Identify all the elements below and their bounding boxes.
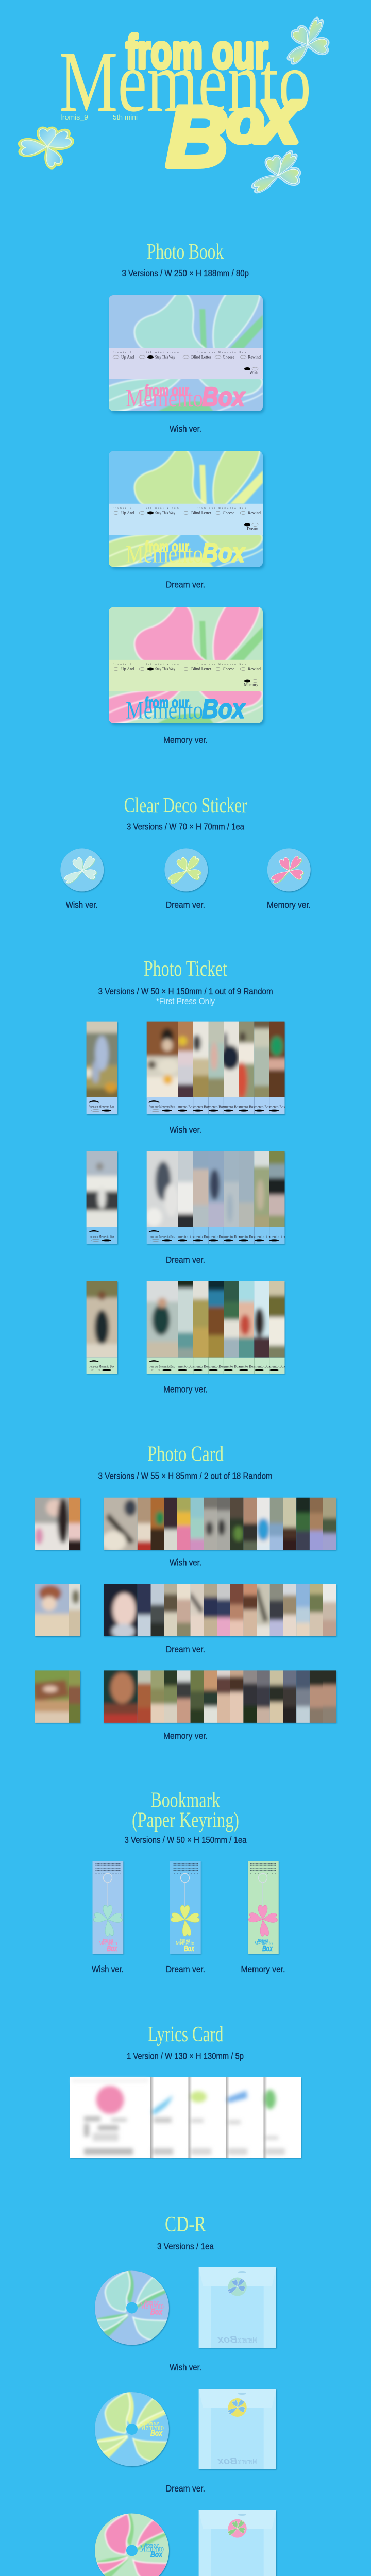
photo card row: Wish xyxy=(30,1493,371,1565)
CD sleeve: Wish xyxy=(199,2267,276,2348)
lyrics card 1 content xyxy=(72,2079,148,2155)
ticket panel text: Dream set: mento Box xyxy=(239,1234,255,1239)
label: card Wish: Wish ver. xyxy=(170,1557,201,1567)
ticket panel text: Wish set: mento Box xyxy=(239,1105,255,1109)
ticket row: Memory xyxy=(82,1277,321,1374)
photo card row: Dream xyxy=(30,1580,371,1651)
panel: Photo Book Memory: Rewind xyxy=(248,667,261,671)
ticket panel text: Memory set: mento Box xyxy=(178,1365,194,1369)
ticket: Memory single xyxy=(82,1277,138,1374)
bookmark: Memory: from our xyxy=(258,1938,268,1943)
cards: Wish single pair xyxy=(30,1493,120,1565)
ticket row: Wish xyxy=(82,1017,321,1114)
label: ticket Memory: Memory ver. xyxy=(163,1384,208,1395)
heading: Lyrics Card: Lyrics Card xyxy=(148,2023,224,2046)
panel: Photo Book Dream: fromis_9 xyxy=(113,506,132,509)
panel: Photo Book Dream: Memento xyxy=(126,539,203,568)
spec: sticker: 3 Versions / W 70 × H 70mm / 1ea xyxy=(127,822,244,832)
panel: Photo Book Wish: Stay This Way xyxy=(155,354,175,360)
CD disc: Wish: Box xyxy=(150,2308,163,2316)
CD disc: Wish: Memento xyxy=(140,2301,164,2311)
CD disc: Memory xyxy=(93,2512,171,2576)
title: Box: o xyxy=(227,88,264,156)
panel: Photo Book Memory: Box xyxy=(202,694,246,724)
panel: Photo Book Wish: Wish xyxy=(249,370,258,375)
ticket panel text: Dream set: mento Box xyxy=(269,1234,285,1239)
ticket panel text: Memory set: mento Box xyxy=(209,1365,225,1369)
label: Memory ver.: Memory ver. xyxy=(163,735,208,745)
heading: Bookmark (Paper Keyring) xyxy=(132,1789,239,1832)
CD disc: Dream: from our xyxy=(145,2421,159,2426)
panel: Photo Book Wish: fromis_9 xyxy=(113,351,132,353)
panel: Photo Book Wish: Cheese xyxy=(223,354,235,360)
panel: Photo Book Wish: Up And xyxy=(121,354,134,360)
bookmark: Wish: Memento xyxy=(99,1940,117,1947)
label: Dream ver.: Dream ver. xyxy=(166,579,205,589)
label: Wish ver.: Wish ver. xyxy=(170,423,201,434)
bookmark: Memory xyxy=(248,1861,279,1954)
panel: Photo Book Dream xyxy=(107,449,263,569)
ticket panel text: Dream set: mento Box xyxy=(194,1234,210,1239)
CD sleeve: Wish: Box xyxy=(217,2334,238,2345)
label: bookmark Wish: Wish ver. xyxy=(92,1964,124,1974)
bookmark: Dream: Box xyxy=(184,1944,194,1953)
heading: CD-R: CD-R xyxy=(165,2213,206,2236)
label: CD Dream: Dream ver. xyxy=(166,2483,205,2494)
title logo xyxy=(59,26,311,185)
tickets: Wish set xyxy=(142,1017,321,1114)
cards: Dream single pair xyxy=(30,1580,120,1651)
label: CD Wish: Wish ver. xyxy=(170,2362,201,2372)
label: sticker Wish: Wish ver. xyxy=(66,900,98,910)
panel: Photo Book Memory: 5th mini album xyxy=(146,663,180,666)
lyrics card 4 content xyxy=(227,2091,247,2155)
lyrics cards xyxy=(70,2077,301,2158)
ticket panel text: Wish set: mento Box xyxy=(194,1105,210,1109)
panel: Photo Book Memory: Up And xyxy=(121,667,134,671)
ticket panel text: Dream set xyxy=(148,1227,285,1244)
CD disc: Memory: from our xyxy=(145,2542,159,2547)
ticket panel text: Wish set: mento Box xyxy=(255,1105,271,1109)
panel: Photo Book Wish: Memento xyxy=(126,384,203,412)
heading: Clear Deco Sticker: Clear Deco Sticker xyxy=(124,794,247,818)
tickets: Dream set xyxy=(142,1146,321,1244)
heading: Photo Card: Photo Card xyxy=(147,1443,224,1466)
ticket panel text: Memory single: from our Memento Box xyxy=(89,1365,114,1369)
panel: Photo Book Wish xyxy=(107,294,263,414)
ticket: Wish single xyxy=(82,1017,138,1114)
spec: CD-R: 3 Versions / 1ea xyxy=(157,2241,214,2251)
label: ticket Wish: Wish ver. xyxy=(170,1125,201,1135)
label: card Dream: Dream ver. xyxy=(166,1644,205,1654)
CD disc: Wish: from our xyxy=(145,2300,159,2305)
label: bookmark Dream: Dream ver. xyxy=(166,1964,205,1974)
spec: bookmark: 3 Versions / W 50 × H 150mm / 1ea xyxy=(125,1835,247,1845)
panel: Photo Book Dream: Blind Letter xyxy=(191,511,211,515)
ticket panel text: Wish set: mento Box xyxy=(269,1105,285,1109)
heading: Photo Ticket: Photo Ticket xyxy=(144,957,227,981)
sticker: Memory xyxy=(267,848,311,891)
panel: Photo Book Memory: Stay This Way xyxy=(155,667,175,671)
ticket panel text: Wish set: mento Box xyxy=(209,1105,225,1109)
panel: Photo Book Dream: from our Memento Box xyxy=(197,506,247,509)
spec: photo card: 3 Versions / W 55 × H 85mm / 2 out of 18 Random xyxy=(98,1470,273,1481)
title: Box: B xyxy=(166,88,228,185)
sticker: Dream xyxy=(164,848,208,891)
CD sleeve: Memory xyxy=(199,2510,276,2576)
bookmark: Memory: Box xyxy=(262,1944,273,1953)
cards: Memory set xyxy=(99,1666,371,1737)
CD disc: Dream: Memento xyxy=(140,2422,164,2432)
panel: Photo Book Dream: 5th mini album xyxy=(146,506,180,509)
ticket panel text: Memory set: mento Box xyxy=(224,1365,240,1369)
ticket panel text: Dream set: mento Box xyxy=(209,1234,225,1239)
heading: Bookmark (Paper Keyring): (Paper Keyring) xyxy=(132,1808,239,1832)
ticket panel text: Wish set: mento Box xyxy=(224,1105,240,1109)
bookmark: Dream xyxy=(170,1861,201,1954)
panel: Photo Book Memory: Blind Letter xyxy=(191,667,211,671)
panel: Photo Book Wish: from our xyxy=(145,382,189,399)
icon: clover left xyxy=(21,129,73,168)
panel: Photo Book Dream: Dream xyxy=(247,526,259,531)
ticket panel text: Wish set xyxy=(148,1097,285,1114)
CD disc: Wish xyxy=(93,2269,171,2346)
ticket panel text: Dream set: mento Box xyxy=(255,1234,271,1239)
bookmark: Dream: Memento xyxy=(176,1940,194,1947)
CD sleeve: Dream: Box xyxy=(217,2456,238,2466)
photo card row: Memory xyxy=(30,1666,371,1737)
spec: Photo Book: 3 Versions / W 250 × H 188mm / 80p xyxy=(122,268,249,278)
ticket panel text: Memory set xyxy=(148,1357,285,1374)
sticker: Wish xyxy=(60,848,104,891)
panel: Photo Book Dream: Rewind xyxy=(248,511,261,515)
ticket panel text: Memory set: mento Box xyxy=(194,1365,210,1369)
ticket panel text: Wish set: mento Box xyxy=(178,1105,194,1109)
heading: Bookmark (Paper Keyring): Bookmark xyxy=(150,1789,220,1812)
label: sticker Memory: Memory ver. xyxy=(267,900,311,910)
bookmark: Wish: from our xyxy=(103,1938,113,1943)
CD disc: Memory: Memento xyxy=(140,2543,164,2553)
lyrics card 3 content xyxy=(190,2091,211,2155)
title: Box: x xyxy=(254,72,303,159)
ticket panel text: Memory single xyxy=(89,1360,114,1371)
panel: Photo Book Dream: Cheese xyxy=(223,511,235,515)
ticket panel text: Wish single: from our Memento Box xyxy=(89,1105,114,1109)
bookmark: Memory: Memento xyxy=(254,1940,273,1947)
label: bookmark Memory: Memory ver. xyxy=(241,1964,285,1974)
panel: Photo Book Wish: from our Memento Box xyxy=(197,351,247,353)
note: first press: *First Press Only xyxy=(156,996,215,1006)
label: card Memory: Memory ver. xyxy=(163,1731,208,1741)
lyrics card 2 content xyxy=(151,2095,173,2155)
label: ticket Dream: Dream ver. xyxy=(166,1255,205,1265)
panel: Photo Book Wish: Box xyxy=(202,382,246,412)
ticket panel text: Memory set: mento Box xyxy=(269,1365,285,1369)
title: from our: from our xyxy=(126,26,268,78)
bookmark: Wish xyxy=(93,1861,123,1954)
heading: Photo Book: Photo Book xyxy=(147,240,224,264)
ticket: Dream single xyxy=(82,1146,138,1244)
panel: Photo Book Memory: from our xyxy=(145,694,189,711)
panel: Photo Book Dream: Stay This Way xyxy=(155,511,175,515)
cards: Memory single pair xyxy=(30,1666,120,1737)
panel: Photo Book Memory: Cheese xyxy=(223,667,235,671)
ticket row: Dream xyxy=(82,1146,321,1244)
ticket panel text: Dream set: mento Box xyxy=(224,1234,240,1239)
artist and album label: fromis_9 xyxy=(60,113,88,121)
cards: Dream set xyxy=(99,1580,371,1651)
artist and album label xyxy=(60,113,138,121)
panel: Photo Book Dream: from our xyxy=(145,538,189,555)
panel: Photo Book Wish: Blind Letter xyxy=(191,354,211,360)
ticket panel text: Memory set: from our Memento Box xyxy=(149,1365,175,1369)
CD disc: Memory: Box xyxy=(150,2550,163,2560)
panel: Photo Book Dream: Up And xyxy=(121,511,134,515)
ticket panel text: Memory set: mento Box xyxy=(239,1365,255,1369)
cards: Wish set xyxy=(99,1493,371,1565)
icon: clover bottom right xyxy=(253,152,299,193)
panel: Photo Book Memory: from our Memento Box xyxy=(197,663,247,666)
panel: Photo Book Memory: Memory xyxy=(244,682,258,687)
spec: lyrics: 1 Version / W 130 × H 130mm / 5p xyxy=(127,2050,244,2061)
ticket panel text: Dream set: from our Memento Box xyxy=(149,1234,175,1239)
bookmark: Dream: from our xyxy=(180,1938,190,1943)
ticket panel text: Dream single xyxy=(89,1230,114,1241)
CD disc: Dream: Box xyxy=(150,2429,163,2438)
ticket panel text: Dream set: mento Box xyxy=(178,1234,194,1239)
ticket panel text: Dream single: from our Memento Box xyxy=(89,1234,114,1239)
bookmark: Wish: Box xyxy=(107,1944,117,1953)
CD disc: Dream xyxy=(93,2391,171,2468)
icon: clover top right xyxy=(288,20,327,63)
CD sleeve: Dream xyxy=(199,2389,276,2469)
label: sticker Dream: Dream ver. xyxy=(166,900,205,910)
CD sleeve: Dream: Memento xyxy=(238,2456,257,2466)
lyrics card 5 content xyxy=(264,2090,285,2155)
panel: Photo Book Memory: Memento xyxy=(126,696,203,724)
panel: Photo Book Wish: 5th mini album xyxy=(146,351,180,353)
tickets: Memory set xyxy=(142,1277,321,1374)
CD sleeve: Wish: Memento xyxy=(238,2335,257,2345)
panel: Photo Book Dream: Box xyxy=(202,538,246,568)
panel: Photo Book Memory xyxy=(107,606,263,725)
ticket panel text: Wish set: from our Memento Box xyxy=(149,1105,175,1109)
panel: Photo Book Wish: Rewind xyxy=(248,354,261,360)
ticket panel text: Wish single xyxy=(89,1100,114,1112)
panel: Photo Book Memory: fromis_9 xyxy=(113,663,132,666)
spec: ticket: 3 Versions / W 50 × H 150mm / 1 out of 9 Random xyxy=(98,986,273,996)
ticket panel text: Memory set: mento Box xyxy=(255,1365,271,1369)
artist and album label: 5th mini xyxy=(113,113,138,121)
